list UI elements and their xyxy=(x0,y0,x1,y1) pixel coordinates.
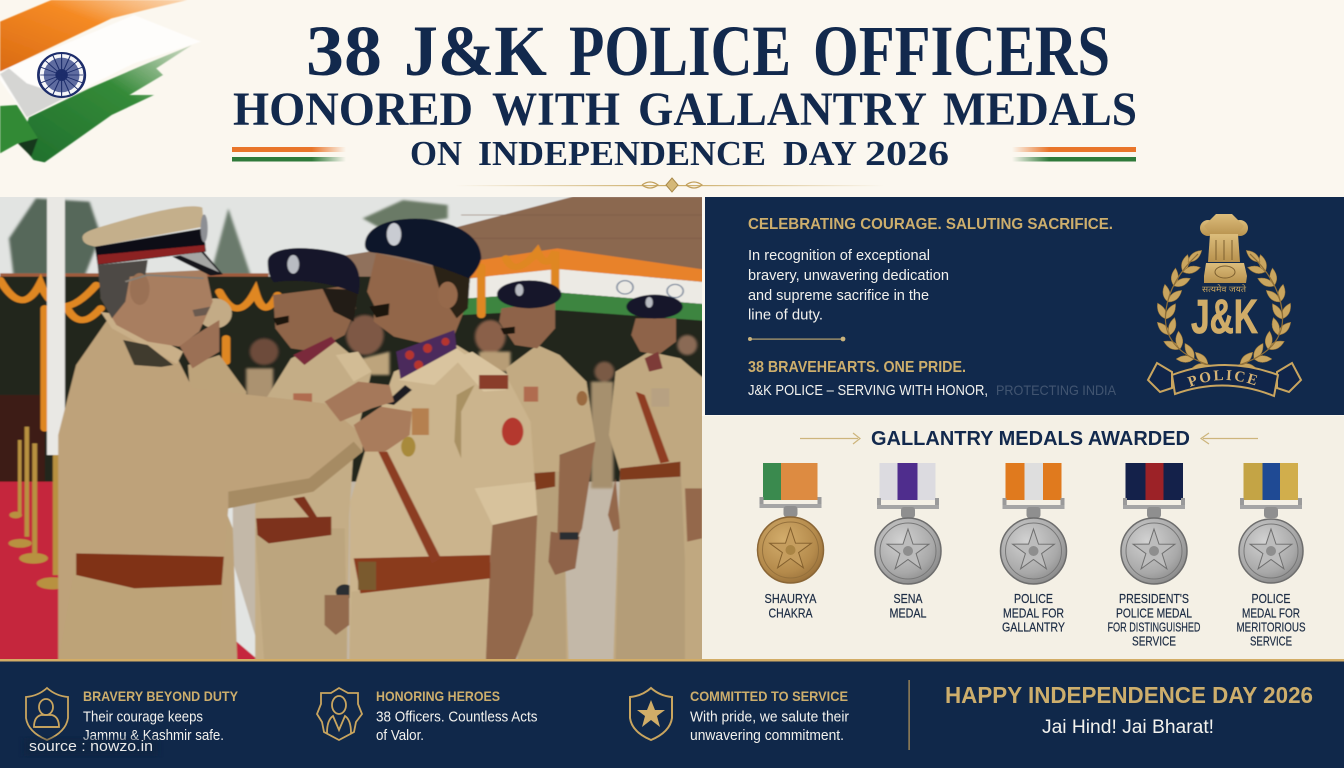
center awarded officer xyxy=(349,219,537,662)
title: OFFICERS xyxy=(813,11,1110,91)
text: honoring heroes: 38 Officers. Countless Acts xyxy=(376,710,538,726)
icon: shield with star xyxy=(630,688,672,740)
footer divider xyxy=(908,680,910,750)
tricolor accents right xyxy=(1012,147,1136,162)
medal: President's Police Medal: PRESIDENT'S xyxy=(1119,592,1189,606)
text: committed to service: COMMITTED TO SERVICE xyxy=(690,688,848,704)
panel: ceremony photo xyxy=(0,197,702,659)
text: serving with honor: J&K POLICE – SERVING WITH HONOR, xyxy=(748,382,988,399)
medal: Police Medal for Gallantry: POLICE xyxy=(1014,592,1053,606)
heading: celebrating courage: CELEBRATING COURAGE. SALUTING SACRIFICE. xyxy=(748,216,1113,233)
medal: President's Police Medal: POLICE MEDAL xyxy=(1116,606,1192,620)
medal: Police Medal for Meritorious Service xyxy=(1236,463,1306,648)
text block: recognition: In recognition of exceptional xyxy=(748,247,930,264)
title: WITH xyxy=(492,83,620,136)
medal: Police Medal for Meritorious Service: SERVICE xyxy=(1250,634,1292,648)
title: DAY xyxy=(783,134,857,173)
national emblem xyxy=(1200,214,1248,283)
panel: footer band xyxy=(0,659,1344,768)
tricolor awning xyxy=(461,248,707,321)
title: MEDALS xyxy=(943,83,1137,136)
ground and red carpet xyxy=(0,395,707,665)
text: serving with honor: PROTECTING INDIA xyxy=(996,382,1117,398)
text: bravery beyond duty: Jammu & Kashmir safe. xyxy=(83,728,224,744)
text: honoring heroes: of Valor. xyxy=(376,728,424,744)
medal: President's Police Medal: FOR DISTINGUISHED xyxy=(1108,620,1200,634)
police ribbon text xyxy=(1186,370,1258,387)
trees and building xyxy=(0,197,707,282)
icon: J&K police emblem xyxy=(1146,214,1302,398)
tricolor accents left xyxy=(232,147,346,162)
text block: recognition: line of duty. xyxy=(748,306,823,324)
title: INDEPENDENCE xyxy=(478,134,766,173)
medal: Police Medal for Meritorious Service: POLICE xyxy=(1252,592,1290,606)
officer second xyxy=(255,248,372,662)
medal: Shaurya Chakra xyxy=(758,463,824,620)
heading: gallantry medals awarded: GALLANTRY MEDALS AWARDED xyxy=(871,427,1190,450)
wreath right xyxy=(1236,248,1294,373)
medal: President's Police Medal: SERVICE xyxy=(1132,634,1176,648)
header background xyxy=(0,0,1344,197)
title: HONORED xyxy=(233,83,473,136)
text: bravery beyond duty xyxy=(83,688,239,744)
marigold garlands xyxy=(0,252,555,428)
J&K letters: J&K xyxy=(1191,291,1258,344)
text block: recognition: bravery, unwavering dedication xyxy=(748,267,949,284)
ornamental divider xyxy=(455,178,885,192)
icon: shield with person xyxy=(26,688,68,740)
medal: Sena Medal: MEDAL xyxy=(890,606,927,620)
flagpole xyxy=(47,195,65,455)
motto: सत्यमेव जयते xyxy=(1202,284,1246,294)
text: bravery beyond duty: BRAVERY BEYOND DUTY xyxy=(83,688,239,704)
callout: happy independence day: HAPPY INDEPENDENCE DAY 2026 xyxy=(945,682,1313,708)
medal: Sena Medal: SENA xyxy=(894,592,923,606)
officer behind left xyxy=(179,298,246,662)
text: committed to service: unwavering commitment. xyxy=(690,728,844,744)
heading: 38 bravehearts: 38 BRAVEHEARTS. ONE PRIDE. xyxy=(748,359,966,376)
title: POLICE xyxy=(569,11,791,91)
panel: gallantry medals xyxy=(702,416,1344,659)
police ribbon text: POLICE xyxy=(1186,370,1258,387)
text: honoring heroes xyxy=(376,688,538,744)
main senior officer xyxy=(58,206,412,662)
title: 2026 xyxy=(865,134,949,173)
officer third xyxy=(497,280,595,662)
background crowd xyxy=(246,315,697,488)
medal: Police Medal for Meritorious Service: MERITORIOUS xyxy=(1236,620,1306,634)
medal: Shaurya Chakra: SHAURYA xyxy=(764,592,817,606)
medal: Shaurya Chakra: CHAKRA xyxy=(768,606,813,620)
ribbon xyxy=(1148,363,1301,396)
canopy shade xyxy=(0,277,707,490)
medal: President's Police Medal xyxy=(1108,463,1200,648)
gold stanchions xyxy=(9,427,69,589)
medal: Police Medal for Gallantry: MEDAL FOR xyxy=(1003,606,1064,620)
text: committed to service xyxy=(690,688,849,744)
title: J&K xyxy=(404,11,547,91)
medal: Sena Medal xyxy=(875,463,941,620)
text: honoring heroes: HONORING HEROES xyxy=(376,688,500,704)
text block: recognition xyxy=(748,247,949,324)
medal: Police Medal for Meritorious Service: MEDAL FOR xyxy=(1242,606,1300,620)
title xyxy=(233,11,1137,173)
wreath left xyxy=(1154,248,1212,373)
title: GALLANTRY xyxy=(638,83,927,136)
title: 38 xyxy=(306,11,382,91)
source credit: source : nowzo.in xyxy=(29,738,153,755)
title: ON xyxy=(410,134,462,173)
panel: navy message panel xyxy=(702,197,1344,417)
medal: Police Medal for Gallantry xyxy=(1000,463,1066,634)
callout: happy independence day xyxy=(945,682,1313,738)
callout: happy independence day: Jai Hind! Jai Bharat! xyxy=(1042,717,1214,738)
medal: Police Medal for Gallantry: GALLANTRY xyxy=(1002,620,1066,634)
divider with dots xyxy=(748,337,845,341)
text block: recognition: and supreme sacrifice in the xyxy=(748,287,929,304)
text: committed to service: With pride, we salute their xyxy=(690,710,849,726)
officer far right xyxy=(608,295,707,662)
text: bravery beyond duty: Their courage keeps xyxy=(83,710,203,726)
icon: Indian flag ribbon xyxy=(0,0,201,162)
icon: honoring heroes xyxy=(317,688,362,740)
